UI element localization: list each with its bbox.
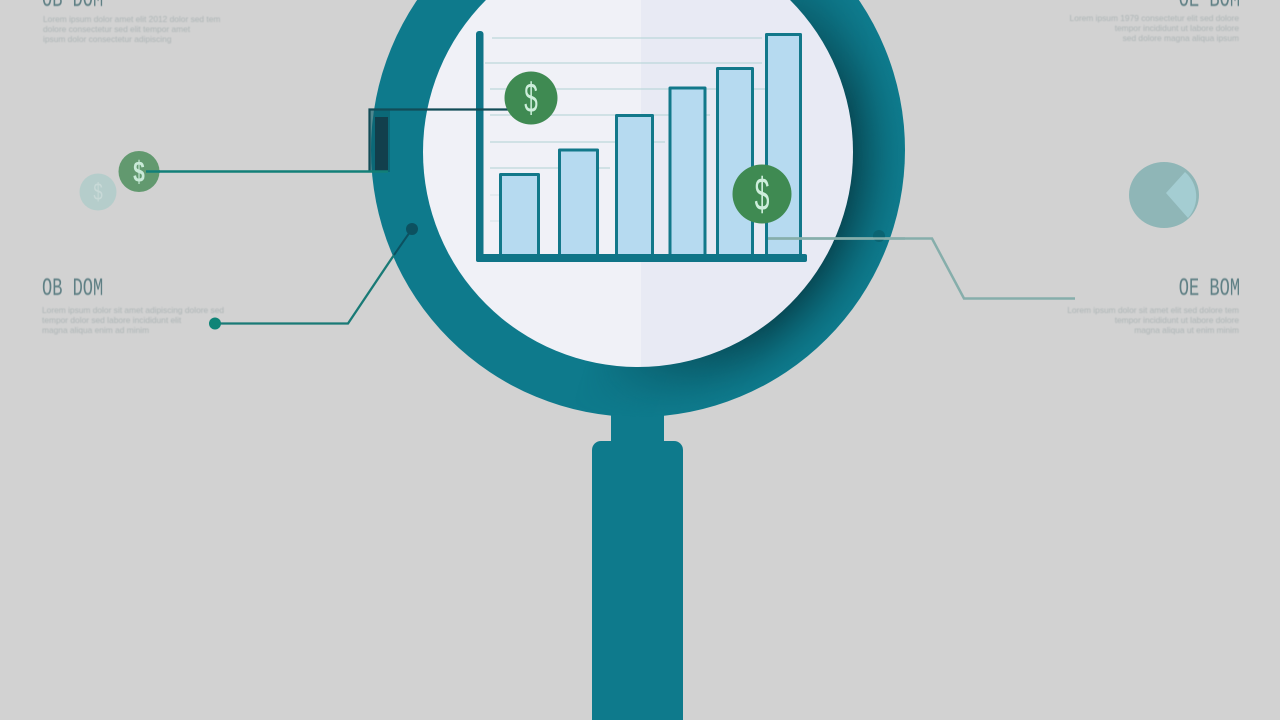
callout: upper left leader bracket: [155, 109, 508, 172]
text block: lower left: [42, 274, 224, 335]
icon: faded coin: $: [93, 179, 103, 206]
body text: top right: Lorem ipsum 1979 consectetur elit sed dolore: [1070, 13, 1239, 23]
icon: coin on chart left: [504, 72, 558, 124]
lens: [423, 0, 853, 367]
body text: lower left: tempor dolor sed labore incididunt elit: [42, 315, 181, 325]
text block: top right: [1070, 0, 1240, 43]
icon: left green coin: $: [133, 157, 145, 189]
bar chart: [476, 31, 807, 262]
body text: lower left: magna aliqua enim ad minim: [42, 325, 149, 335]
magnifying glass: [371, 0, 905, 720]
ring: [371, 0, 905, 417]
body text: top left: Lorem ipsum dolor amet elit 2012 dolor sed tem: [43, 14, 220, 24]
heading: lower right: OE BOM: [1179, 274, 1240, 303]
text block: top left: [42, 0, 220, 44]
body text: top left: ipsum dolor consectetur adipiscing: [43, 34, 171, 44]
icon: faded coin: [80, 174, 116, 210]
body text: top left: [43, 14, 220, 44]
body text: lower left: Lorem ipsum dolor sit amet adipiscing dolore sed: [42, 305, 224, 315]
grid lines: [485, 38, 765, 221]
text block: lower right: [1067, 274, 1240, 335]
body text: lower left: [42, 305, 224, 335]
icon: faded pie: [1129, 162, 1199, 228]
body text: top right: sed dolore magna aliqua ipsum: [1123, 33, 1239, 43]
body text: top right: [1070, 13, 1239, 43]
body text: top right: tempor incididunt ut labore dolore: [1115, 23, 1239, 33]
icon: coin on chart left: $: [524, 75, 538, 122]
body text: top left: dolore consectetur sed elit tempor amet: [43, 24, 190, 34]
body text: lower right: magna aliqua ut enim minim: [1134, 325, 1239, 335]
arrow: right connector: [768, 230, 1075, 298]
axes: [476, 31, 807, 262]
handle: [592, 405, 683, 720]
body text: lower right: Lorem ipsum dolor sit amet elit sed dolore tem: [1067, 305, 1239, 315]
icon: coin on chart right: $: [755, 168, 769, 220]
body text: lower right: [1067, 305, 1239, 335]
body text: lower right: tempor incididunt ut labore dolore: [1115, 315, 1239, 325]
icon: coin on chart right: [732, 164, 792, 224]
icon: left green coin: [118, 151, 160, 192]
arrow: lower left connector: [209, 223, 418, 330]
bars: [500, 34, 800, 257]
heading: lower left: OB DOM: [42, 274, 103, 303]
